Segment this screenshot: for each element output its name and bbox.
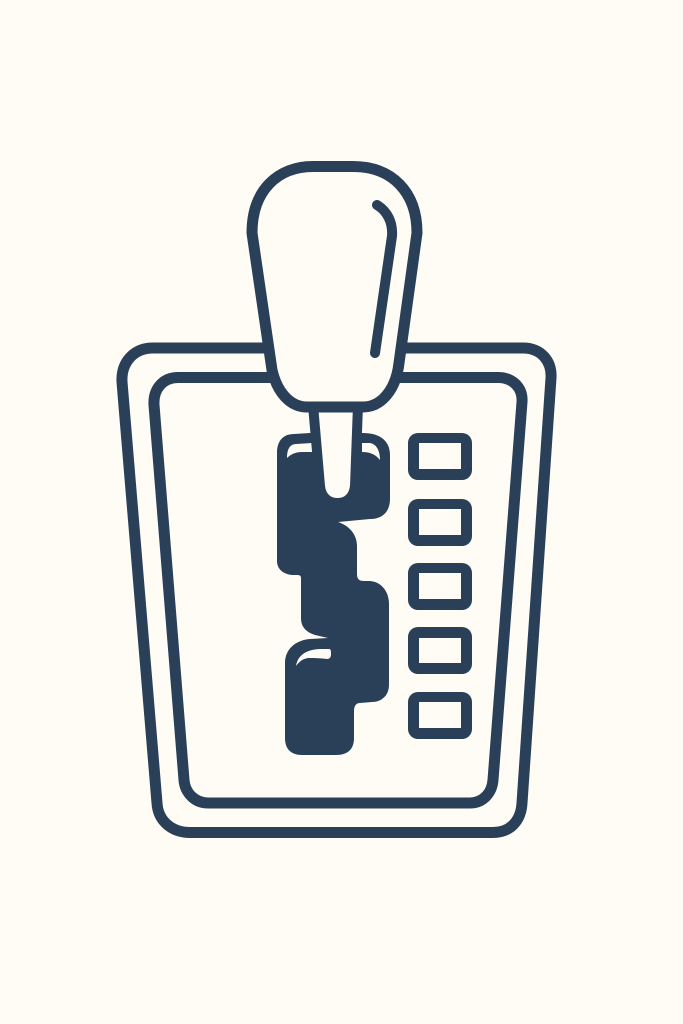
gear selector slot bbox=[277, 433, 390, 755]
slot highlight: top left bbox=[287, 443, 312, 458]
slot highlight: top right bbox=[362, 443, 380, 460]
shifter shaft bbox=[313, 405, 358, 503]
knob highlight bbox=[375, 205, 392, 353]
indicator 1 bbox=[408, 433, 472, 480]
panel: inner console frame bbox=[154, 378, 522, 803]
panel: outer console frame bbox=[122, 348, 551, 832]
indicator 2 bbox=[408, 499, 472, 546]
indicator 3 bbox=[408, 563, 472, 610]
shifter knob bbox=[252, 166, 417, 407]
indicator 4 bbox=[408, 627, 472, 674]
gear position indicators bbox=[408, 433, 472, 739]
indicator 5 bbox=[408, 692, 472, 739]
slot highlight: lower bbox=[296, 649, 331, 666]
